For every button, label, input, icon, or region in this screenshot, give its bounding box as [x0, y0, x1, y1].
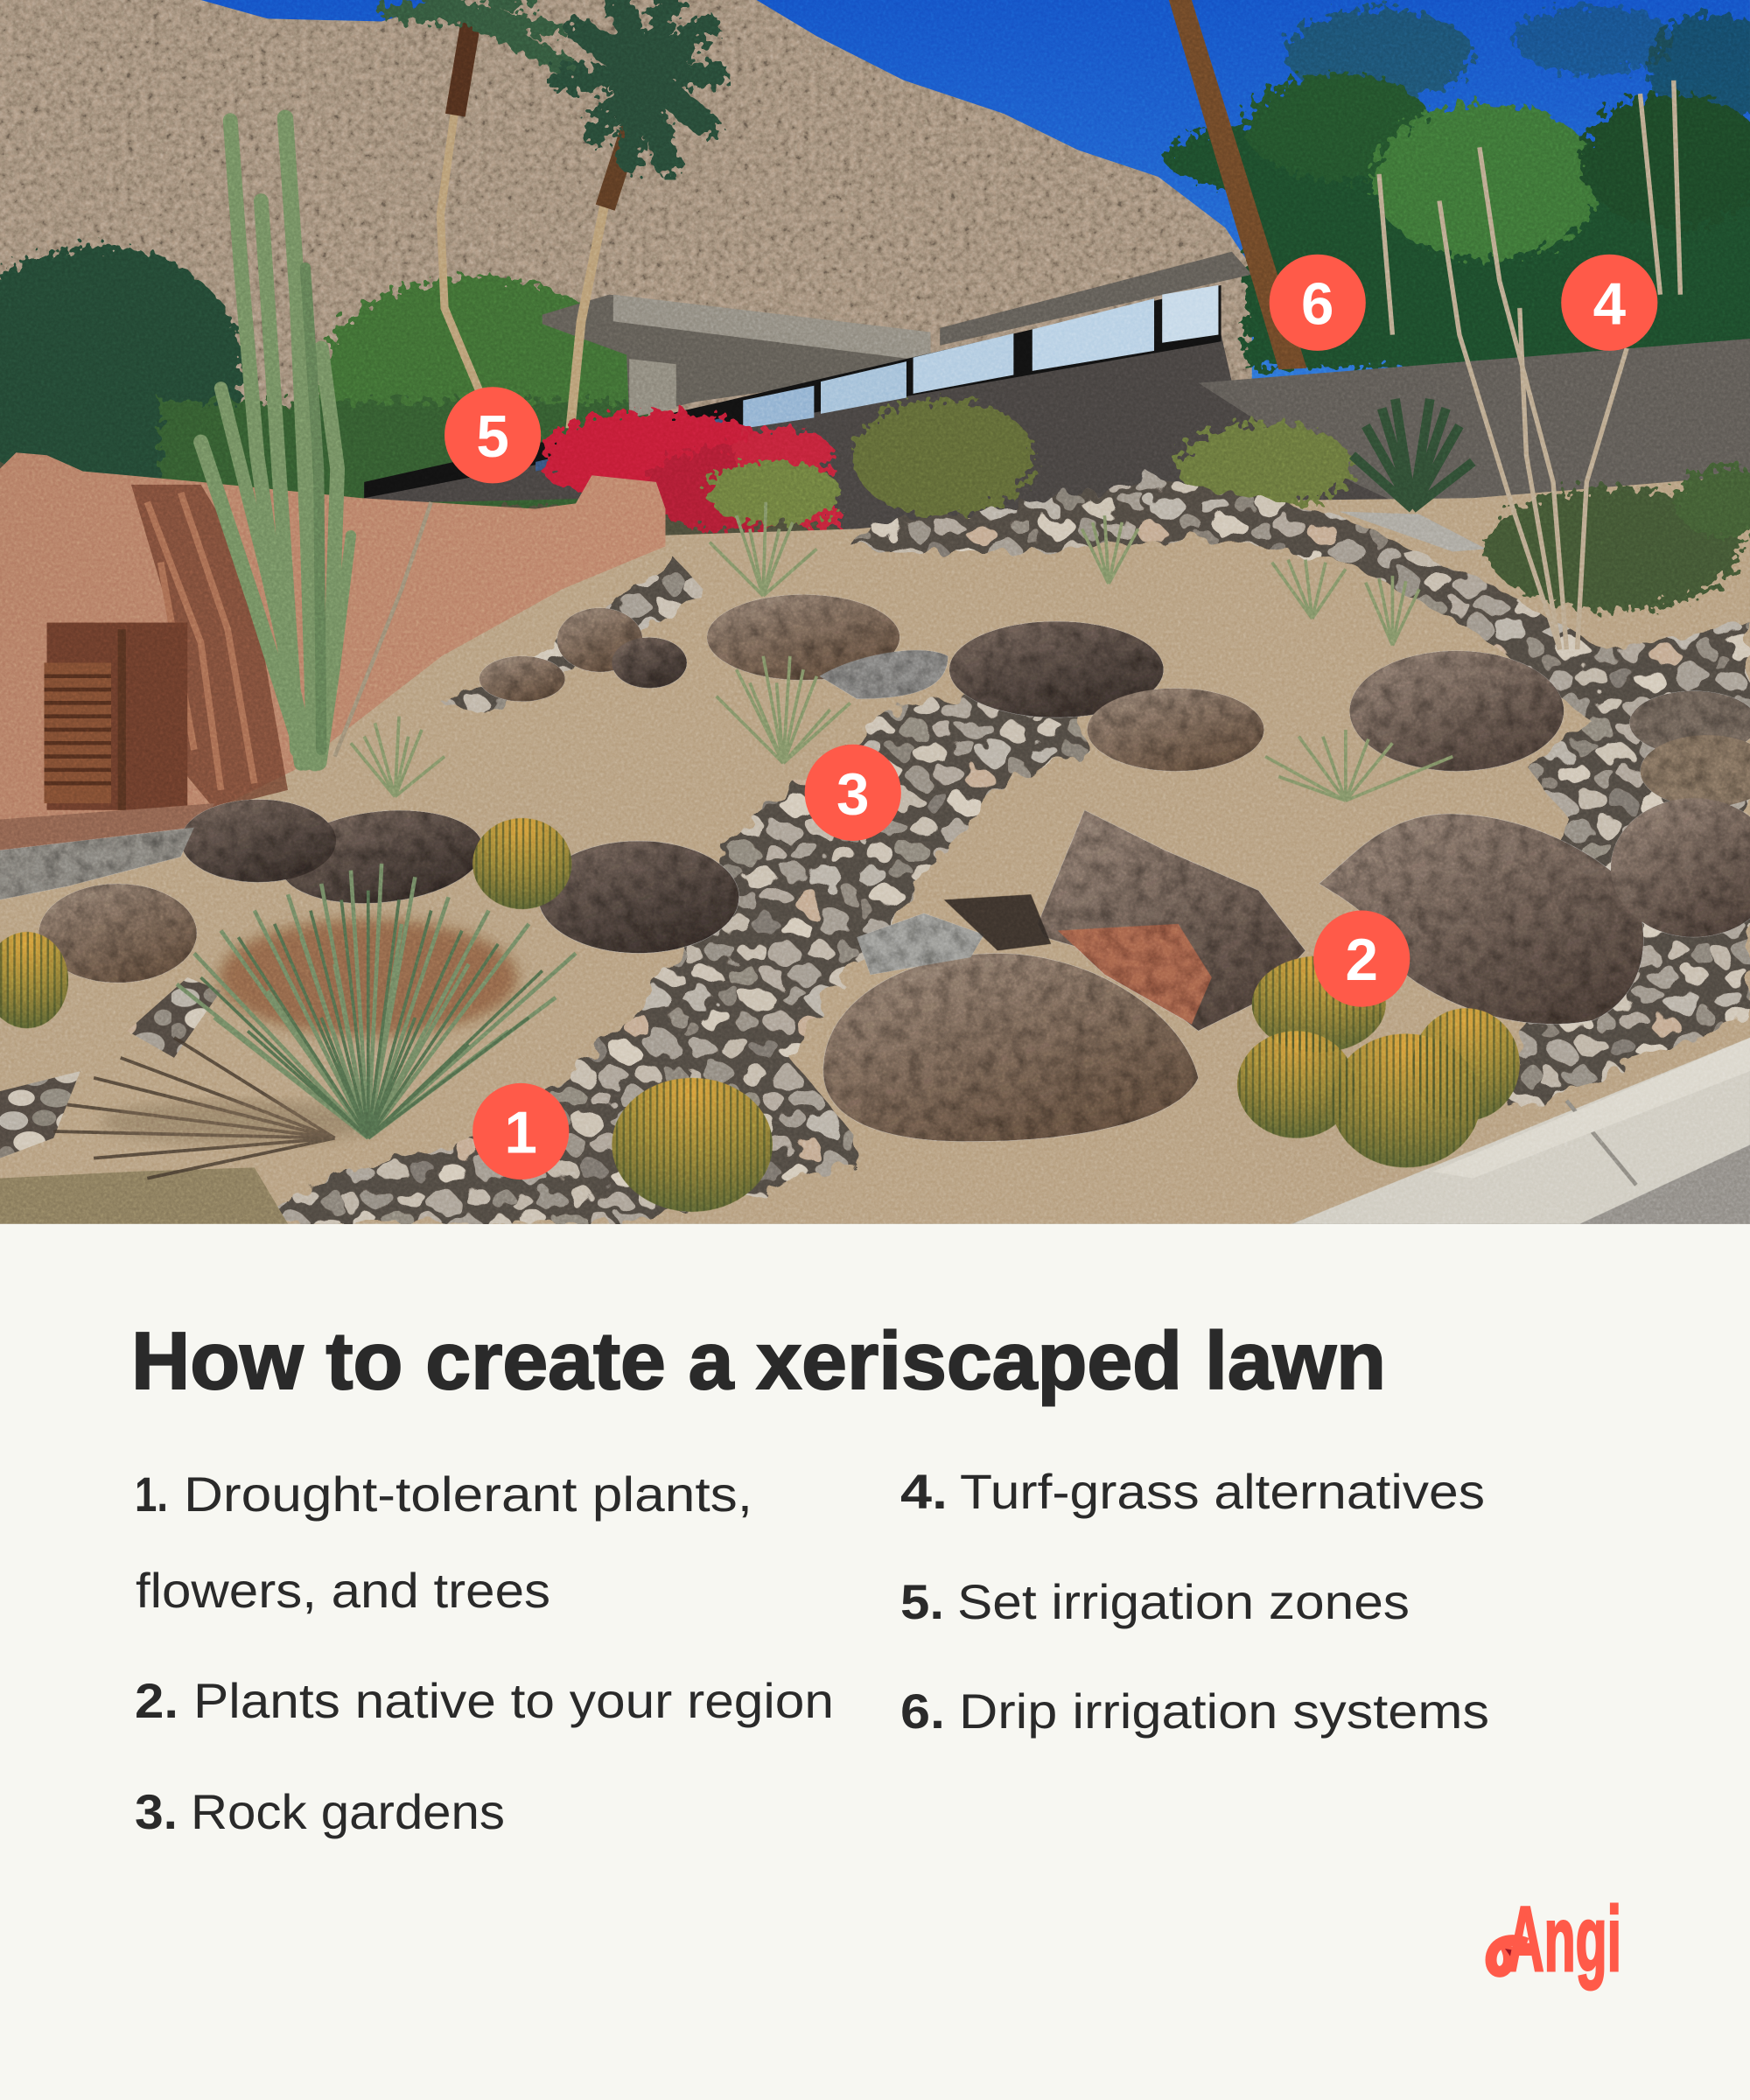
- photo grain: [0, 0, 1750, 1224]
- flat dark boulder: [276, 801, 487, 913]
- marker 5: 5: [476, 404, 509, 470]
- back left bush: [0, 245, 243, 492]
- ground slab at doorway: [0, 803, 214, 857]
- gravel bed right: [857, 475, 1750, 1111]
- boulders: [0, 594, 1750, 1142]
- barrel cactus foreground: [612, 1078, 773, 1212]
- marker 2: [1313, 911, 1410, 1007]
- marker 3: [805, 745, 901, 841]
- ocotillo shadow on wall: [131, 485, 288, 808]
- brown boulder far left: [38, 884, 197, 983]
- list item 3: 3.: [135, 1784, 178, 1839]
- marker 4: [1561, 255, 1657, 351]
- grey slab: [0, 828, 194, 900]
- barrel cactus cluster right: [1237, 956, 1520, 1167]
- list item 3: Rock gardens: [191, 1784, 505, 1839]
- marker 6: 6: [1301, 271, 1334, 337]
- Angi logo: [1491, 1888, 1621, 1991]
- palm tree right: [563, 0, 715, 429]
- marker 5: [444, 387, 541, 483]
- left boulder: [181, 800, 336, 882]
- list item 2: 2.: [135, 1673, 178, 1728]
- gravel strip along wall: [442, 560, 703, 712]
- curb: [1292, 1038, 1750, 1224]
- gravel river centre: [255, 696, 1088, 1224]
- barrel cactus left: [0, 932, 68, 1028]
- concrete building upper volume: [542, 252, 1252, 417]
- louvered shutter: [44, 662, 111, 803]
- scattered stones left: [127, 977, 220, 1058]
- list item 4: 4.: [900, 1464, 948, 1519]
- dark wall with stepped top: [364, 335, 1750, 536]
- list item 1: [135, 1466, 752, 1618]
- marker 3: 3: [836, 761, 869, 827]
- palm tree left: [388, 0, 569, 391]
- foreground flowers and shrub: [0, 1167, 288, 1224]
- list item 1: flowers, and trees: [136, 1563, 550, 1618]
- orange rock patch: [1058, 924, 1212, 1025]
- desert shrubs: [707, 399, 1750, 611]
- marker 2: 2: [1345, 928, 1378, 993]
- list item 5: 5.: [900, 1574, 944, 1629]
- marker 6: [1270, 255, 1366, 351]
- grass shadow: [53, 1038, 382, 1179]
- doorway recess: [47, 623, 187, 810]
- list item 1: Drought-tolerant plants,: [184, 1466, 752, 1522]
- right large boulder: [1319, 814, 1643, 1024]
- under-fill behind lower scene: [0, 442, 1750, 1224]
- red bougainvillea: [542, 411, 841, 531]
- photo: xeriscaped desert yard: [0, 0, 1750, 1224]
- dark boulder middle: [538, 841, 739, 954]
- list item 2: Plants native to your region: [193, 1673, 834, 1728]
- large centre boulder: [823, 954, 1199, 1142]
- list item 6: Drip irrigation systems: [959, 1684, 1489, 1739]
- upper boulders: [707, 594, 900, 680]
- list item 4: Turf-grass alternatives: [960, 1464, 1485, 1519]
- red-brown rock behind grass: [218, 919, 518, 1036]
- window band: [364, 285, 1222, 498]
- list item 5: Set irrigation zones: [957, 1574, 1410, 1629]
- middle green bush: [161, 276, 642, 508]
- title: How to create a xeriscaped lawn: [131, 1315, 1386, 1406]
- hillside: [0, 0, 1258, 455]
- sky: [201, 0, 1750, 379]
- pale walkway right: [1339, 512, 1487, 551]
- rock shadow: [944, 894, 1051, 950]
- ocotillo dry stem: [335, 502, 431, 757]
- trees upper right: [1165, 5, 1750, 368]
- list item 1: 1.: [135, 1466, 168, 1522]
- marker 4: 4: [1593, 271, 1627, 337]
- agave on wall bed: [1353, 399, 1473, 508]
- gravel left edge: [0, 1071, 80, 1158]
- right ocotillo: [1379, 80, 1680, 649]
- Angi logo: Angi: [1507, 1888, 1621, 1991]
- adobe wall: [0, 452, 666, 844]
- small grass clumps: [351, 502, 1452, 801]
- sand ground: [0, 475, 1750, 1224]
- marker 1: 1: [505, 1101, 537, 1166]
- left ocotillo: [201, 118, 351, 763]
- large foreground grass: [177, 864, 576, 1138]
- list item 6: 6.: [900, 1684, 945, 1739]
- angular boulder: [1038, 810, 1306, 1031]
- barrel cactus middle: [472, 818, 571, 909]
- tall leaning palm trunk: [1169, 0, 1306, 369]
- marker 1: [472, 1083, 569, 1180]
